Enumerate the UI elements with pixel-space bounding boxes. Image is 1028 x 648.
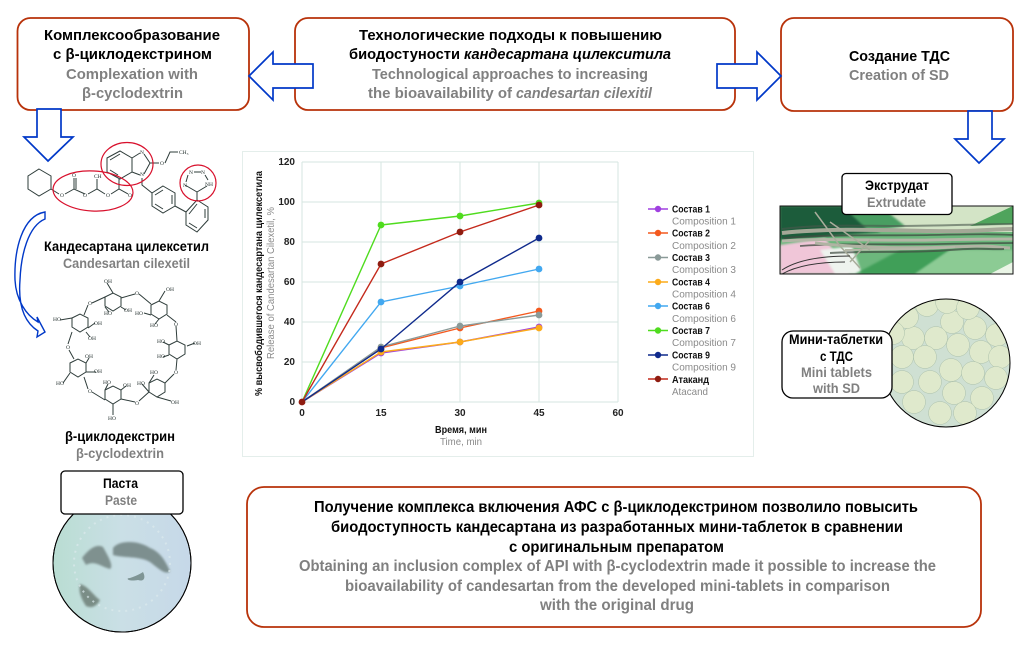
photo: paste [52,514,192,632]
box: conclusion: bioavailability of candesartan from the developed mini-tablets in comparison [345,578,890,595]
molecule: beta-cyclodextrin: HO [103,380,111,386]
box: technological approaches: кандесартана цилекситила [464,46,671,63]
box: technological approaches: биодостуности [349,46,460,63]
molecule: beta-cyclodextrin: OH [193,341,201,347]
molecule: candesartan cilexetil: N [183,183,187,189]
box: creation of SD: Creation of SD [849,67,949,84]
molecule: candesartan cilexetil: O [60,193,64,199]
box: technological approaches: the bioavailability of [368,85,513,102]
y axis ticks [278,157,295,408]
box: conclusion: биодоступность кандесартана из разработанных мини-таблеток в сравнении [331,519,903,536]
legend: Состав 7 [672,325,710,337]
legend: Атаканд [672,374,709,386]
label: beta-cyclodextrin: β-циклодекстрин [65,429,175,444]
molecule: beta-cyclodextrin: HO [104,311,112,317]
molecule: beta-cyclodextrin: O [135,401,139,407]
label: beta-cyclodextrin [65,429,175,461]
x axis ticks: 15 [375,408,387,419]
photo: mini tablets [888,298,1010,428]
x axis ticks: 60 [612,408,624,419]
molecule: beta-cyclodextrin: OH [123,383,131,389]
box: creation of SD [781,18,1013,111]
box: complexation [18,18,249,110]
arrow: down from complexation [24,109,73,161]
molecule: beta-cyclodextrin: HO [157,354,165,360]
molecule: beta-cyclodextrin: OH [94,321,102,327]
arrow: to complexation [249,52,313,100]
label: beta-cyclodextrin: β-cyclodextrin [76,446,164,461]
legend: Состав 2 [672,228,710,240]
molecule: beta-cyclodextrin: OH [88,336,96,342]
series: composition 7 [302,200,542,402]
molecule: beta-cyclodextrin: HO [150,323,158,329]
series: composition 6 [302,266,542,402]
label: candesartan cilexetil: Кандесартана цилексетил [44,239,209,254]
box: conclusion: with the original drug [539,597,694,614]
molecule: candesartan cilexetil: CH₃ [179,150,189,156]
highlight: benzimidazole [101,142,153,186]
molecule: candesartan cilexetil [28,150,213,232]
molecule: candesartan cilexetil: N [201,170,205,176]
legend: Composition 1 [672,216,736,228]
label: candesartan cilexetil [44,239,209,271]
legend: Composition 6 [672,313,736,325]
molecule: beta-cyclodextrin [53,279,201,422]
molecule: candesartan cilexetil: O [160,161,164,167]
molecule: beta-cyclodextrin: HO [108,416,116,422]
legend: Composition 4 [672,288,736,300]
y axis ticks: 60 [284,277,295,288]
molecule: candesartan cilexetil: O [83,193,87,199]
box: technological approaches: Технологические подходы к повышению [359,27,662,44]
molecule: candesartan cilexetil: O [128,193,132,199]
box: technological approaches [295,18,735,110]
series: composition 3 [302,312,542,402]
molecule: candesartan cilexetil: N [140,150,144,156]
box: technological approaches: candesartan cilexitil [516,85,653,102]
legend: Состав 3 [672,252,710,264]
x axis ticks: 45 [533,408,545,419]
highlight: tetrazole [180,165,216,201]
label: candesartan cilexetil: Candesartan cilexetil [63,256,190,271]
series: composition 4 [302,325,542,402]
label: extrudate: Экструдат [865,178,929,193]
molecule: beta-cyclodextrin: HO [135,311,143,317]
box: creation of SD: Создание ТДС [849,48,950,65]
molecule: beta-cyclodextrin: HO [157,339,165,345]
series: composition 2 [302,308,542,402]
molecule: beta-cyclodextrin: OH [171,400,179,406]
box: technological approaches: Technological approaches to increasing [372,66,648,83]
box: complexation: β-cyclodextrin [82,85,183,102]
molecule: beta-cyclodextrin: OH [166,287,174,293]
molecule: beta-cyclodextrin: HO [53,317,61,323]
molecule: beta-cyclodextrin: O [174,322,178,328]
box: conclusion [247,487,981,627]
y axis ticks: 100 [278,197,295,208]
molecule: beta-cyclodextrin: OH [94,369,102,375]
axis title: x [435,424,487,448]
molecule: beta-cyclodextrin: O [135,291,139,297]
molecule: beta-cyclodextrin: OH [124,308,132,314]
molecule: beta-cyclodextrin: OH [104,279,112,285]
molecule: beta-cyclodextrin: HO [137,381,145,387]
arrow: curved to cyclodextrin [15,212,45,337]
molecule: candesartan cilexetil: CH [94,174,102,180]
y axis ticks: 40 [284,317,295,328]
box: conclusion: с оригинальным препаратом [509,539,724,556]
axis title: y: % высвободившегося кандесартана цилексетила [253,171,265,396]
x axis ticks: 30 [454,408,466,419]
legend: Состав 6 [672,300,710,312]
molecule: candesartan cilexetil: NH [205,182,213,188]
label: mini tablets [782,331,892,398]
molecule: beta-cyclodextrin: OH [85,354,93,360]
label: paste: Паста [103,476,138,491]
arrow: to creation of SD [717,52,781,100]
x axis ticks [299,408,624,419]
axis title: x: Время, мин [435,424,487,436]
legend: Composition 7 [672,337,736,349]
molecule: beta-cyclodextrin: O [88,389,92,395]
molecule: candesartan cilexetil: N [189,170,193,176]
legend [648,204,736,398]
label: paste: Paste [105,493,137,508]
molecule: beta-cyclodextrin: O [66,345,70,351]
y axis ticks: 120 [278,157,295,168]
molecule: beta-cyclodextrin: HO [150,370,158,376]
label: extrudate: Extrudate [867,195,926,210]
molecule: beta-cyclodextrin: O [174,370,178,376]
label: paste [61,471,183,514]
photo: extrudate [780,206,1013,274]
box: complexation: Комплексообразование [44,27,220,44]
legend: Состав 4 [672,276,710,288]
molecule: beta-cyclodextrin: O [88,301,92,307]
x axis ticks: 0 [299,408,305,419]
label: mini tablets: с ТДС [820,349,853,364]
molecule: candesartan cilexetil: O [72,173,76,179]
legend: Composition 3 [672,264,736,276]
arrow: down from creation of SD [955,111,1004,163]
axis title: x: Time, min [440,436,482,448]
molecule: candesartan cilexetil: O [106,193,110,199]
chart: release curves [242,152,754,456]
label: mini tablets: with SD [812,381,860,396]
label: mini tablets: Мини-таблетки [789,332,883,347]
axis title: y [253,171,277,396]
legend: Состав 1 [672,204,710,216]
molecule: beta-cyclodextrin: HO [56,381,64,387]
legend: Atacand [672,386,708,398]
axis title: y: Release of Candesartan Cilexetil, % [265,207,277,359]
series: composition 1 [302,324,542,402]
label: mini tablets: Mini tablets [801,365,872,380]
box: conclusion: Получение комплекса включения АФС с β-циклодекстрином позволило повысить [314,499,918,516]
y axis ticks: 0 [289,397,295,408]
box: complexation: с β-циклодекстрином [53,46,212,63]
molecule: candesartan cilexetil: N [140,172,144,178]
highlight: ester group [52,169,134,213]
series: composition 9 [302,235,542,402]
series: atacand [299,202,542,405]
y axis ticks: 20 [284,357,295,368]
y axis ticks: 80 [284,237,295,248]
legend: Composition 2 [672,240,736,252]
box: conclusion: Obtaining an inclusion complex of API with β-cyclodextrin made it possible to increase the [299,558,936,575]
legend: Composition 9 [672,362,736,374]
box: complexation: Complexation with [66,66,198,83]
label: extrudate [842,174,952,214]
legend: Состав 9 [672,350,710,362]
